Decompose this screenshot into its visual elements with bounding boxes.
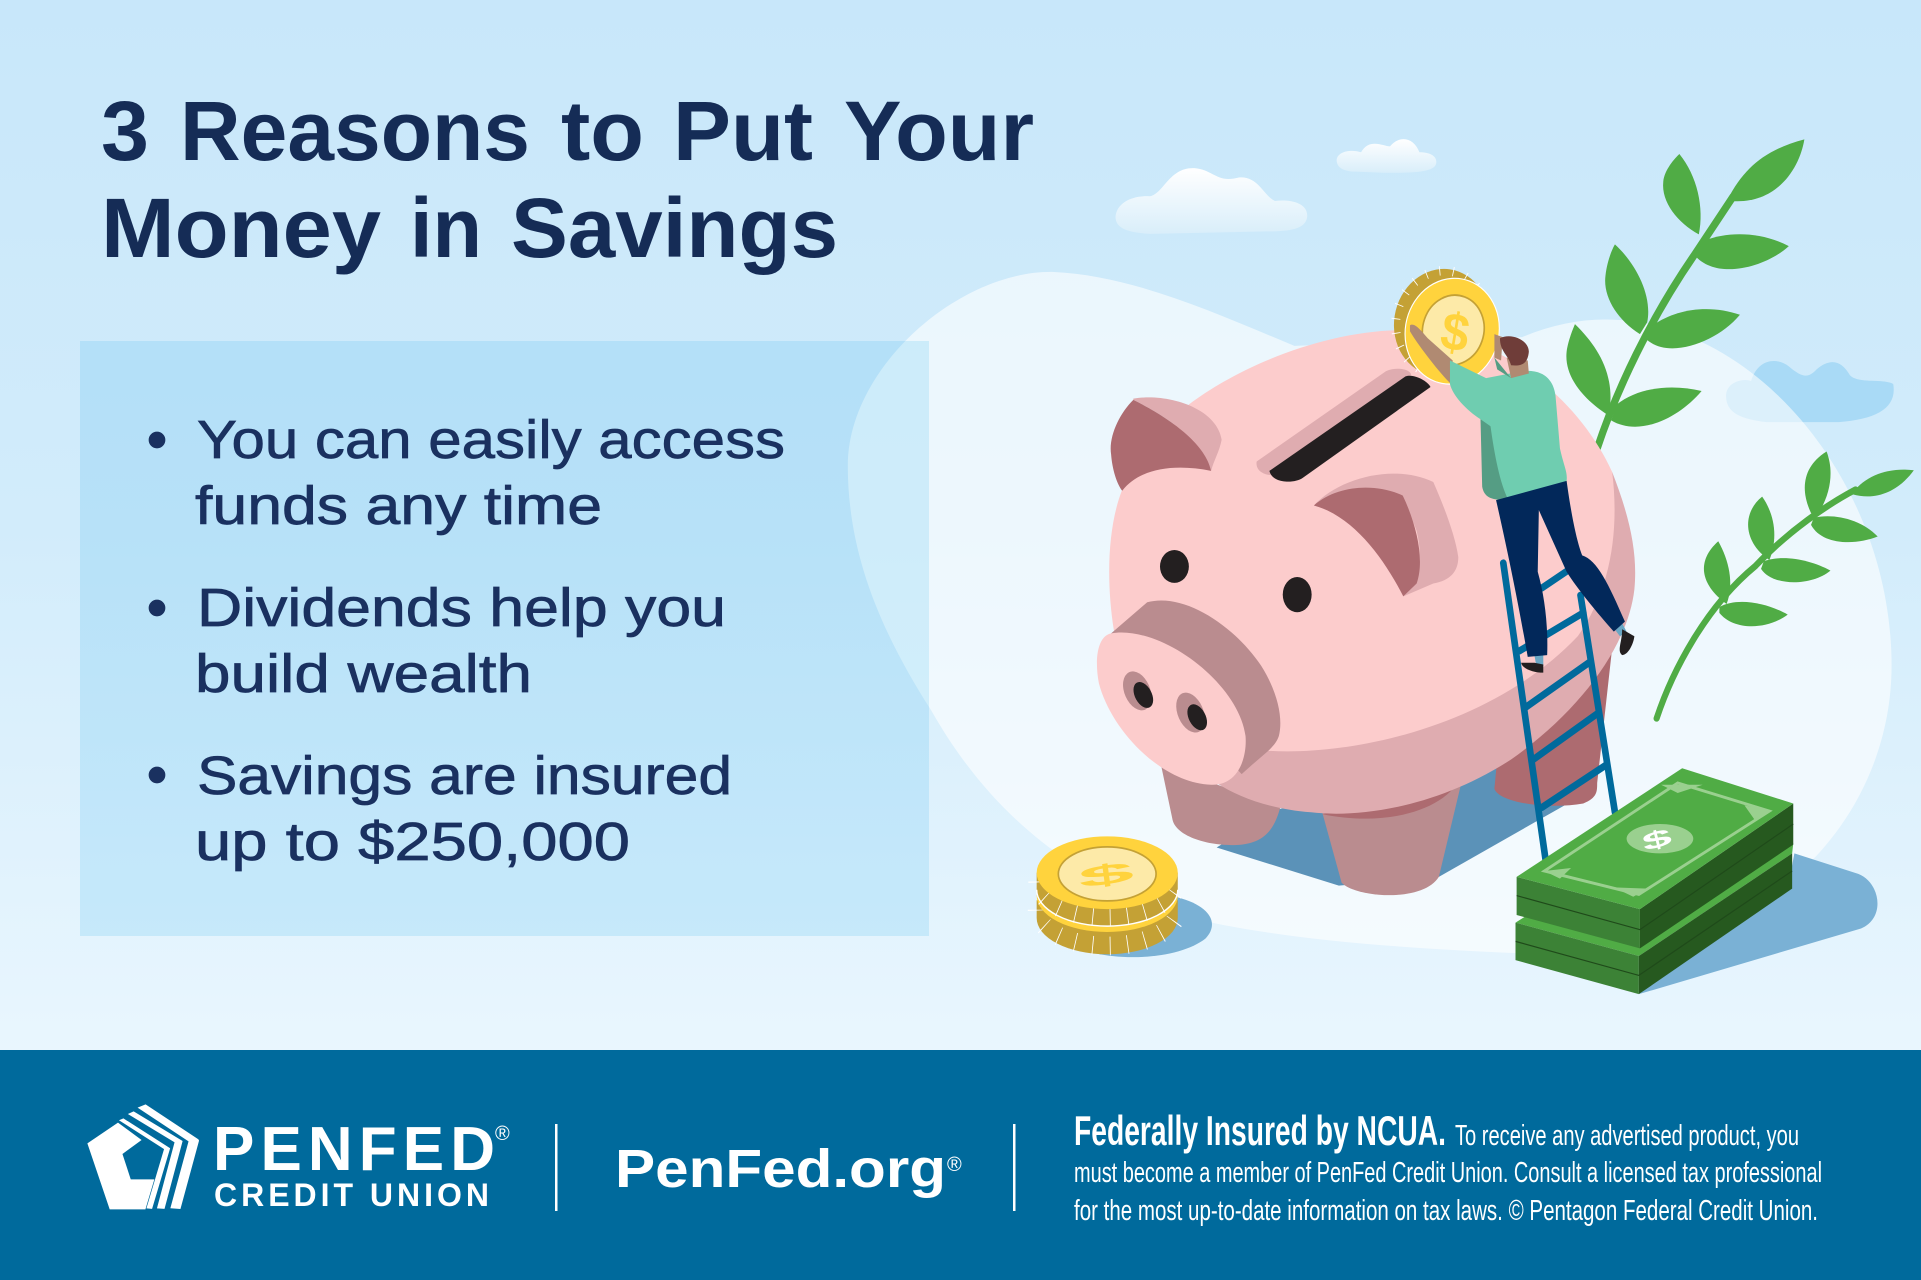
website: ® <box>947 1154 962 1176</box>
plant: upper branch <box>1566 139 1804 449</box>
bill border <box>1544 783 1769 894</box>
logo wordmark: CREDIT UNION <box>214 1177 489 1213</box>
coin slot <box>1257 369 1431 482</box>
front right leg <box>1322 772 1464 895</box>
left ear <box>1111 397 1222 491</box>
bullet 1: funds any time <box>195 476 602 536</box>
shoes <box>1620 629 1634 655</box>
illustration backdrop: clouds and blob <box>848 139 1894 954</box>
cloud: blue <box>1726 361 1894 422</box>
bullet 1: You can easily access <box>197 410 785 470</box>
logo wordmark: PENFED <box>213 1115 495 1184</box>
title <box>101 84 1034 275</box>
disclosure: Federally Insured by NCUA. <box>1074 1107 1446 1154</box>
hair <box>1500 336 1529 365</box>
back leg <box>1494 648 1612 806</box>
title: Reasons <box>180 84 530 178</box>
gold coin stack: $ <box>1076 855 1136 895</box>
front left leg <box>1161 765 1281 845</box>
title: Your <box>844 84 1034 178</box>
large coin <box>1380 255 1513 398</box>
bullet 3: Savings are insured <box>197 746 732 806</box>
bullet 1 <box>149 410 785 536</box>
lower stack <box>1516 843 1793 956</box>
shirt shade <box>1481 419 1508 500</box>
trousers <box>1496 481 1625 657</box>
logo wordmark <box>213 1115 510 1213</box>
bullet 3: up to $250,000 <box>195 812 630 872</box>
body top <box>1109 330 1615 751</box>
ladder <box>1503 563 1615 859</box>
bullet 2 <box>149 578 726 704</box>
pig shadow <box>1217 760 1583 886</box>
socks <box>1534 623 1627 666</box>
bullet list <box>149 410 785 872</box>
stack of bills: $ <box>1639 823 1674 857</box>
money shadow <box>1639 853 1877 994</box>
website: PenFed.org <box>615 1139 946 1199</box>
piggy bank <box>1097 330 1635 895</box>
collar and neck <box>1494 358 1511 378</box>
raised arm <box>1410 325 1453 384</box>
person climbing <box>1410 325 1634 673</box>
right ear <box>1314 474 1458 596</box>
title: Money <box>101 181 381 275</box>
leg top shadow <box>1322 772 1464 819</box>
title: 3 <box>101 84 149 178</box>
title: Put <box>673 84 813 178</box>
background blob <box>848 272 1892 954</box>
bullet 2: Dividends help you <box>197 578 726 638</box>
bullet 2: build wealth <box>195 644 532 704</box>
shirt <box>1450 361 1567 500</box>
coin stack shadow <box>1094 897 1212 957</box>
cloud: small <box>1337 139 1436 173</box>
divider <box>555 1124 558 1211</box>
bill corners <box>1544 785 1771 897</box>
bullet 3 <box>149 746 732 872</box>
disclosure <box>1074 1107 1822 1227</box>
body underside <box>1217 472 1635 814</box>
illustration: piggy bank scene <box>1037 139 1914 994</box>
large coin: $ <box>1437 300 1474 364</box>
title: in <box>410 181 482 275</box>
cloud: large <box>1116 168 1307 234</box>
logo wordmark: ® <box>495 1123 510 1145</box>
eyes <box>1160 550 1312 612</box>
stack of bills <box>1516 768 1793 994</box>
footer band <box>0 1050 1921 1280</box>
upper stack <box>1517 877 1640 948</box>
gold coin stack <box>1037 836 1178 954</box>
divider <box>1013 1124 1016 1211</box>
bill medallion <box>1627 824 1693 853</box>
logo mark <box>87 1106 194 1209</box>
title: Savings <box>511 181 838 275</box>
back arm <box>1494 334 1503 361</box>
plant: lower branch <box>1657 451 1914 718</box>
bullet panel <box>80 341 929 936</box>
title: to <box>561 84 644 178</box>
snout <box>1097 600 1280 785</box>
